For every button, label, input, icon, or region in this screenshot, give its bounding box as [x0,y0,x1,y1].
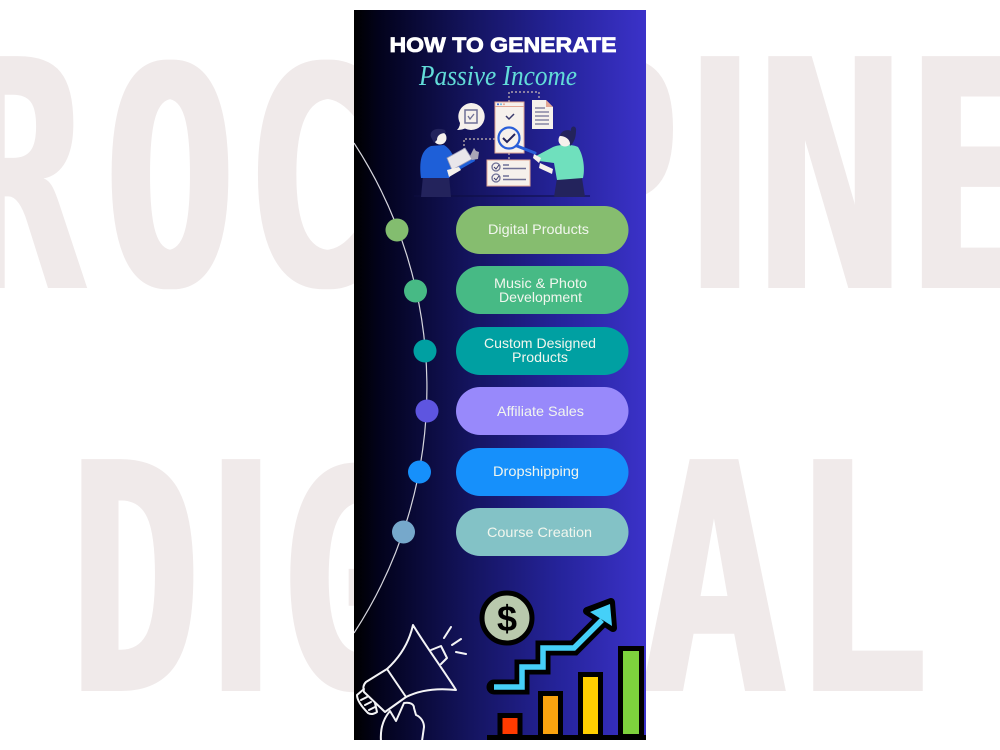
bar: green [620,648,642,736]
pill: digital products [456,206,628,254]
pill: dropshipping: Dropshipping [493,463,579,479]
bar: red [500,716,520,736]
pill: digital products: Digital Products [488,221,589,237]
background watermark: DIGITAL [70,386,929,750]
pill: course creation [456,508,628,556]
arrow: rising stepped arrow [494,602,613,687]
illustration: two people reviewing documents [414,92,590,197]
icon: checklist card [487,160,530,186]
timeline dot 3 [414,340,436,362]
icon: browser document [495,102,524,153]
icon: megaphone held by hand [357,625,466,741]
pill: music and photo development: Development [499,289,582,305]
pill: custom designed products [456,327,628,375]
pill: course creation: Course Creation [487,524,592,540]
timeline curve [354,143,427,633]
pill: music and photo development [456,266,628,314]
pill: dropshipping [456,448,628,496]
background watermark: ROCKPINE: P [549,0,679,364]
background watermark: ROCKPINE: O [105,4,235,358]
pill: custom designed products: Products [512,349,568,365]
background watermark: ROCKPINE: K [393,0,525,364]
panel: infographic background [354,10,646,740]
icon: dollar coin: $ [497,598,517,639]
icon: dollar coin [482,593,532,643]
background watermark: ROCKPINE: C [245,4,375,358]
timeline dot 5 [408,460,431,484]
timeline dot 4 [416,400,438,422]
icon: magnifying glass [498,128,535,153]
title: how to generate: HOW TO GENERATE [390,33,616,57]
pill: music and photo development: Music & Photo [494,275,587,291]
icon: man with clipboard [420,129,479,197]
timeline dot 2 [404,280,427,302]
pill: affiliate sales: Affiliate Sales [497,403,584,419]
timeline dot 6 [392,520,415,544]
pill: affiliate sales [456,387,628,435]
icon: speech bubble with checkbox [457,103,485,130]
background watermark: ROCKPINE [0,0,1000,364]
bar: yellow [580,674,600,736]
subtitle: passive income: Passive Income [418,61,577,92]
background watermark: DIGITAL: G [281,407,411,750]
icon: paper sheet [532,100,553,129]
pill: custom designed products: Custom Designed [484,335,596,351]
timeline dot 1 [386,218,408,242]
bar chart with growth bars [487,648,646,740]
icon: woman with magnifier [533,126,585,197]
background watermark: ROCKPINE: N [757,0,903,363]
bar: orange [540,694,560,736]
